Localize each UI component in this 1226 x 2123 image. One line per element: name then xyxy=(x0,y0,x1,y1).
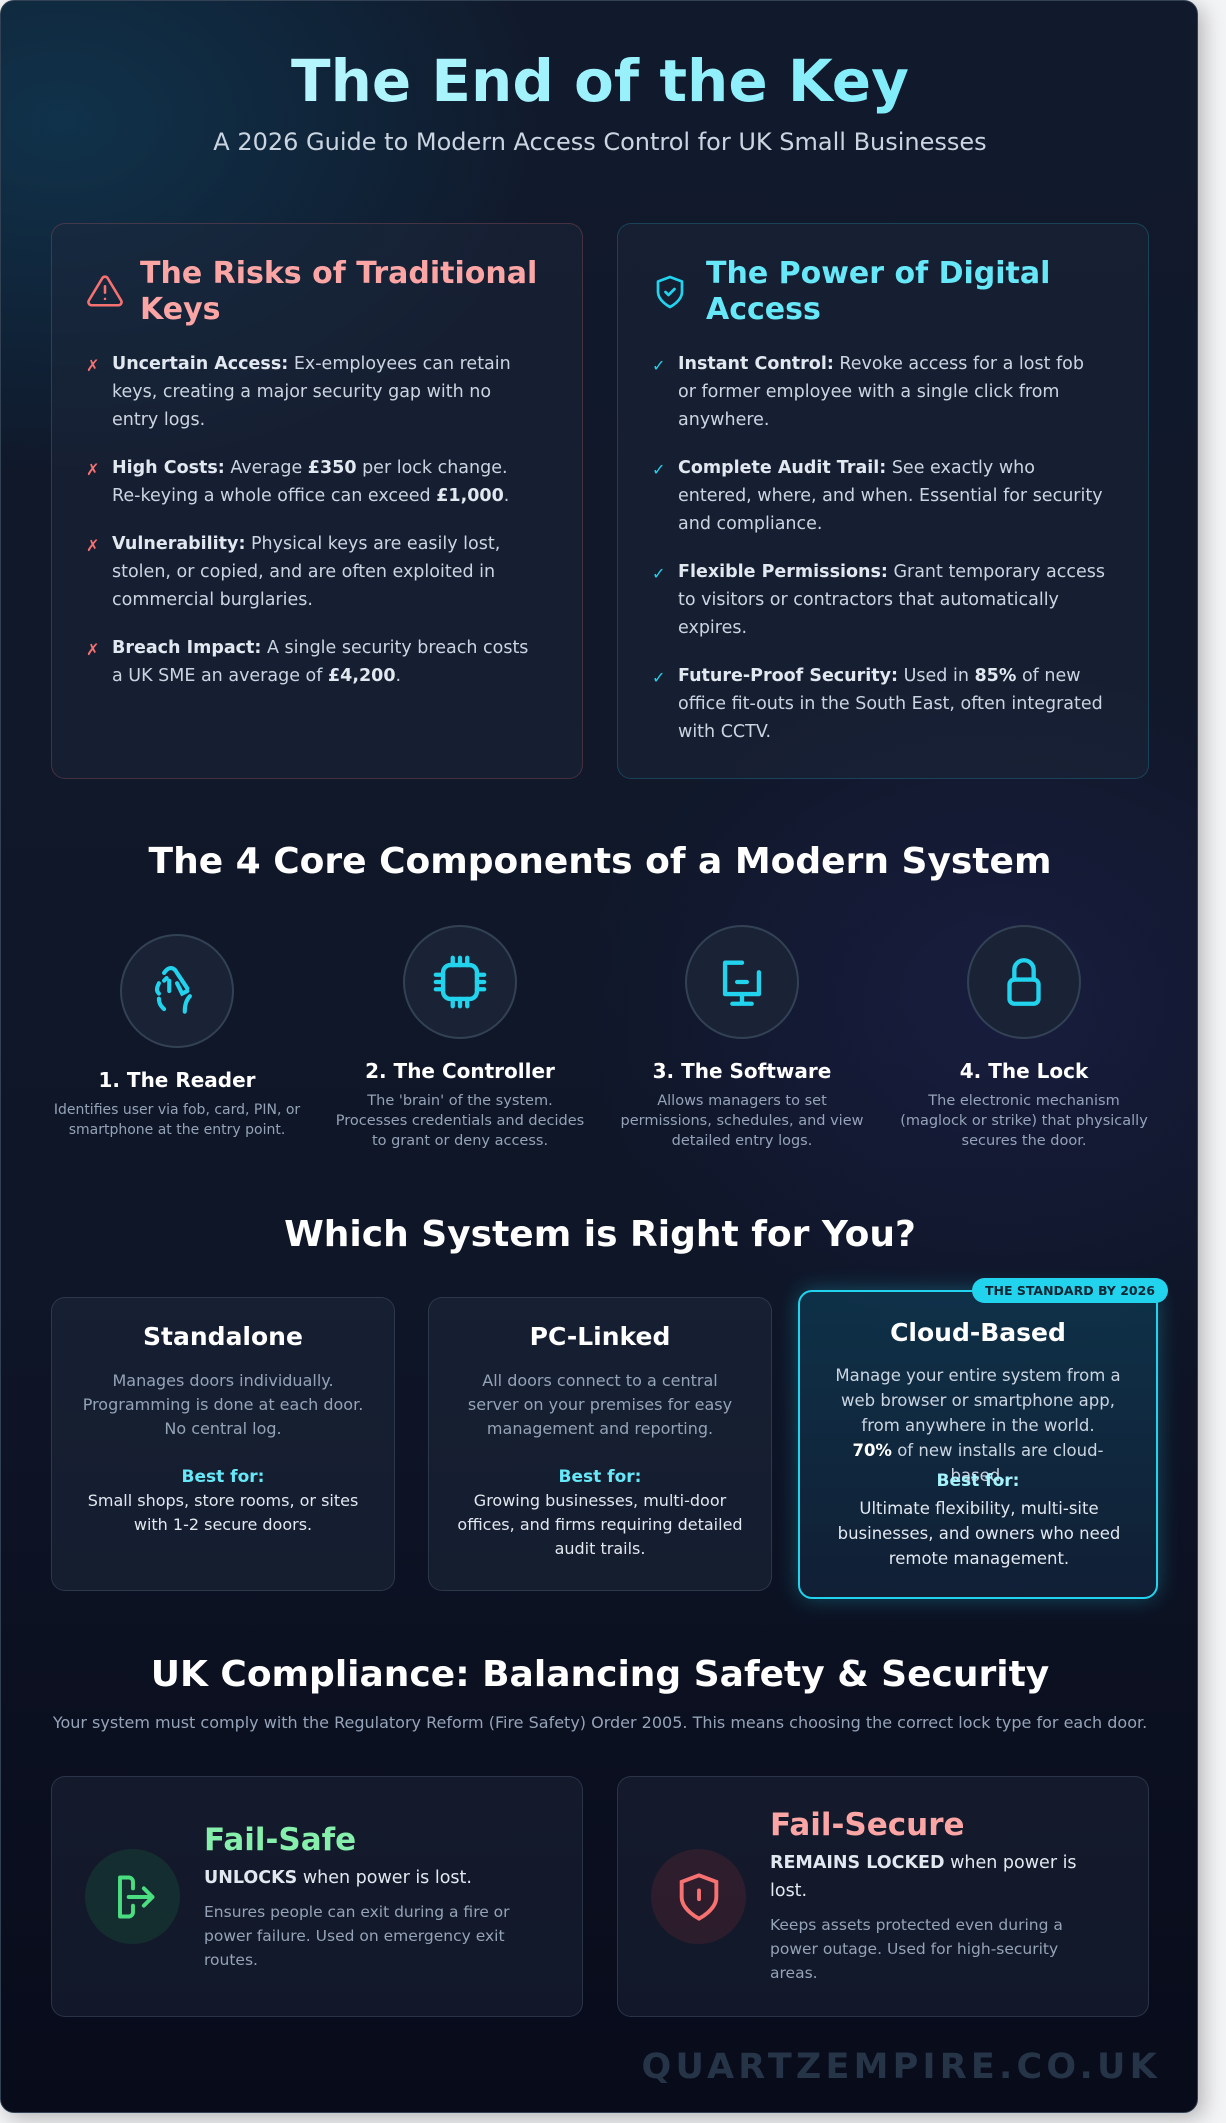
component: reader: Identifies user via fob, card, PIN, or smartphone at the entry point. xyxy=(54,1102,300,1138)
card: cloud-based: 70% of new installs are cloud-based. xyxy=(852,1441,1104,1485)
heading: risks: Keys xyxy=(140,292,220,327)
component: lock: 4. The Lock xyxy=(960,1059,1088,1083)
badge: standard by 2026: THE STANDARD BY 2026 xyxy=(985,1283,1155,1298)
component: software: Allows managers to set permissions, schedules, and view detailed entry logs. xyxy=(620,1093,864,1149)
text: compliance intro: Your system must comply with the Regulatory Reform (Fire Safety) Order 2005. This means choosing the correct lock type for each door. xyxy=(53,1713,1147,1732)
list: benefits: Instant Control: Revoke access for a lost fob xyxy=(678,354,1084,374)
watermark: QUARTZEMPIRE.CO.UK xyxy=(642,2047,1161,2087)
card: standalone: Small shops, store rooms, or sites with 1-2 secure doors. xyxy=(88,1491,358,1534)
card: cloud-based: Best for: xyxy=(937,1471,1019,1491)
card: cloud-based: Manage your entire system from a web browser or smartphone app, from anywhere in the world. xyxy=(835,1366,1121,1435)
list: benefits: ✓ xyxy=(652,356,665,375)
title: The End of the Key xyxy=(291,47,909,115)
list: risks: Uncertain Access: Ex-employees can retain keys, creating a major security gap with no entry logs. xyxy=(112,354,511,430)
list: benefits: ✓ xyxy=(652,668,665,687)
list: risks: ✗ xyxy=(86,356,99,375)
component: lock: The electronic mechanism (maglock or strike) that physically secures the door. xyxy=(900,1093,1148,1149)
list: benefits: Complete Audit Trail: See exactly who entered, where, and when. Essential for security and compliance. xyxy=(678,458,1103,534)
component: controller xyxy=(336,925,584,1149)
title xyxy=(1,47,1199,115)
subtitle: A 2026 Guide to Modern Access Control for UK Small Businesses xyxy=(213,128,987,156)
panel: risks xyxy=(51,223,583,779)
text: fail-secure xyxy=(770,1807,1077,1982)
icon: shield check xyxy=(656,276,684,308)
heading: digital xyxy=(706,256,1050,327)
heading: digital: Access xyxy=(706,292,821,327)
card: standalone: Standalone xyxy=(143,1322,303,1351)
card: pc-linked xyxy=(428,1297,772,1591)
card: pc-linked: PC-Linked xyxy=(530,1322,670,1351)
panel: digital xyxy=(617,223,1149,779)
component: controller: 2. The Controller xyxy=(365,1059,555,1083)
panel: fail-safe xyxy=(51,1776,583,2017)
card: standalone: Manages doors individually. Programming is done at each door. No central log. xyxy=(83,1371,363,1438)
list: benefits: or former employee with a single click from anywhere. xyxy=(678,382,1059,430)
card: standalone: Best for: xyxy=(182,1467,264,1487)
heading: risks xyxy=(140,256,537,327)
list: risks: Vulnerability: Physical keys are easily lost, stolen, or copied, and are often exploited in commercial burglaries. xyxy=(112,534,500,610)
list: risks: ✗ xyxy=(86,640,99,659)
text: fail-safe: UNLOCKS when power is lost. xyxy=(204,1868,472,1888)
icon: warning xyxy=(87,275,123,306)
text: fail-safe: Fail-Safe xyxy=(204,1822,356,1858)
list: benefits: Future-Proof Security: Used in 85% of new office fit-outs in the South East, often integrated with CCTV. xyxy=(678,666,1103,742)
heading: compliance: UK Compliance: Balancing Safety & Security xyxy=(151,1654,1049,1695)
card: pc-linked: Growing businesses, multi-door offices, and firms requiring detailed audit trails. xyxy=(457,1491,743,1558)
heading: components: The 4 Core Components of a Modern System xyxy=(149,841,1051,882)
list: risks: High Costs: Average £350 per lock change. Re‑keying a whole office can exceed £1,000. xyxy=(112,458,509,506)
text: fail-secure: Fail-Secure xyxy=(770,1807,965,1843)
component: lock xyxy=(900,925,1148,1149)
component: reader xyxy=(54,934,300,1138)
list: risks xyxy=(86,354,528,686)
icon: padlock xyxy=(967,925,1081,1039)
list: risks: Breach Impact: A single security breach costs a UK SME an average of £4,200. xyxy=(112,638,528,686)
text: fail-secure: Keeps assets protected even during a power outage. Used for high-security areas. xyxy=(770,1916,1063,1982)
heading: digital: The Power of Digital xyxy=(706,256,1050,291)
list: risks: ✗ xyxy=(86,536,99,555)
icon: exit xyxy=(85,1849,180,1944)
text: fail-safe xyxy=(204,1822,510,1969)
card: pc-linked: All doors connect to a central server on your premises for easy management and reporting. xyxy=(468,1371,732,1438)
list: benefits: Flexible Permissions: Grant temporary access to visitors or contractors that automatically expires. xyxy=(678,562,1105,638)
text: fail-safe: Ensures people can exit during a fire or power failure. Used on emergency exit routes. xyxy=(204,1903,510,1969)
icon: shield alert xyxy=(651,1849,746,1944)
heading: risks: The Risks of Traditional xyxy=(140,256,537,291)
component: controller: The 'brain' of the system. Processes credentials and decides to grant or deny access. xyxy=(336,1093,584,1149)
text: fail-secure: REMAINS LOCKED when power is lost. xyxy=(770,1853,1077,1901)
card: cloud-based xyxy=(798,1290,1158,1599)
card: standalone xyxy=(51,1297,395,1591)
component: software xyxy=(620,925,864,1149)
icon: chip xyxy=(403,925,517,1039)
component: software: 3. The Software xyxy=(653,1059,831,1083)
heading: which system: Which System is Right for You? xyxy=(284,1214,916,1255)
list: benefits: ✓ xyxy=(652,460,665,479)
badge: standard by 2026 xyxy=(972,1278,1168,1303)
icon: monitor xyxy=(685,925,799,1039)
icon: fingerprint xyxy=(120,934,234,1048)
panel: fail-secure xyxy=(617,1776,1149,2017)
card: cloud-based: Ultimate flexibility, multi-site businesses, and owners who need remote management. xyxy=(838,1499,1120,1568)
list: risks: ✗ xyxy=(86,460,99,479)
card: cloud-based: Cloud-Based xyxy=(890,1318,1066,1347)
list: benefits: ✓ xyxy=(652,564,665,583)
component: reader: 1. The Reader xyxy=(98,1068,256,1092)
card: pc-linked: Best for: xyxy=(559,1467,641,1487)
list: benefits xyxy=(652,354,1105,742)
